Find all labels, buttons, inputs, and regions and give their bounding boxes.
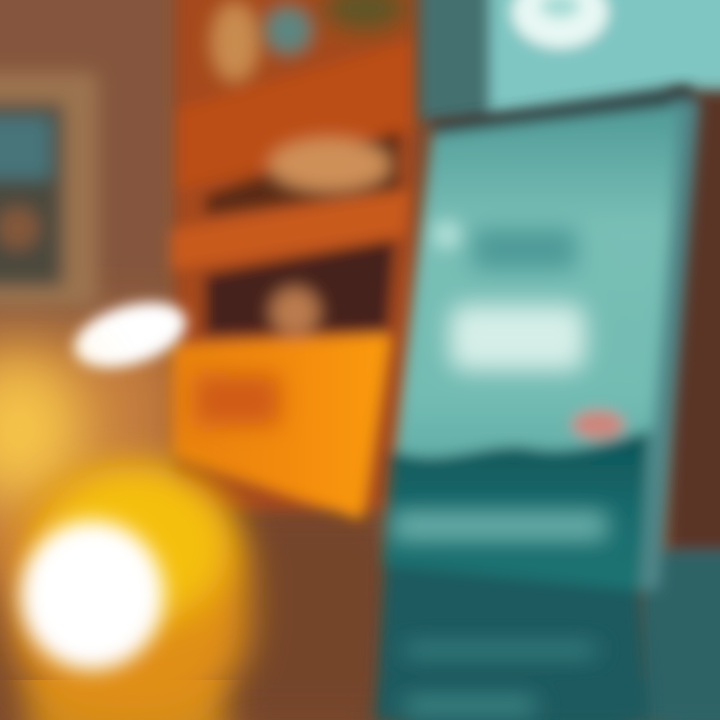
poster lower caption blur — [392, 512, 607, 540]
poster light number blur — [450, 305, 585, 370]
lower teal stand details — [405, 640, 595, 717]
right side wall — [640, 90, 720, 720]
poster lower dark wave band — [382, 430, 650, 590]
white lamp ellipse — [66, 290, 194, 380]
teal window top right — [420, 0, 720, 120]
teal poster stand — [375, 85, 700, 720]
poster red badge — [572, 410, 624, 438]
picture frame on the left wall — [0, 72, 98, 307]
glowing lamp — [0, 355, 250, 720]
poster heading blur — [472, 228, 577, 270]
orange shelving unit — [170, 0, 415, 520]
